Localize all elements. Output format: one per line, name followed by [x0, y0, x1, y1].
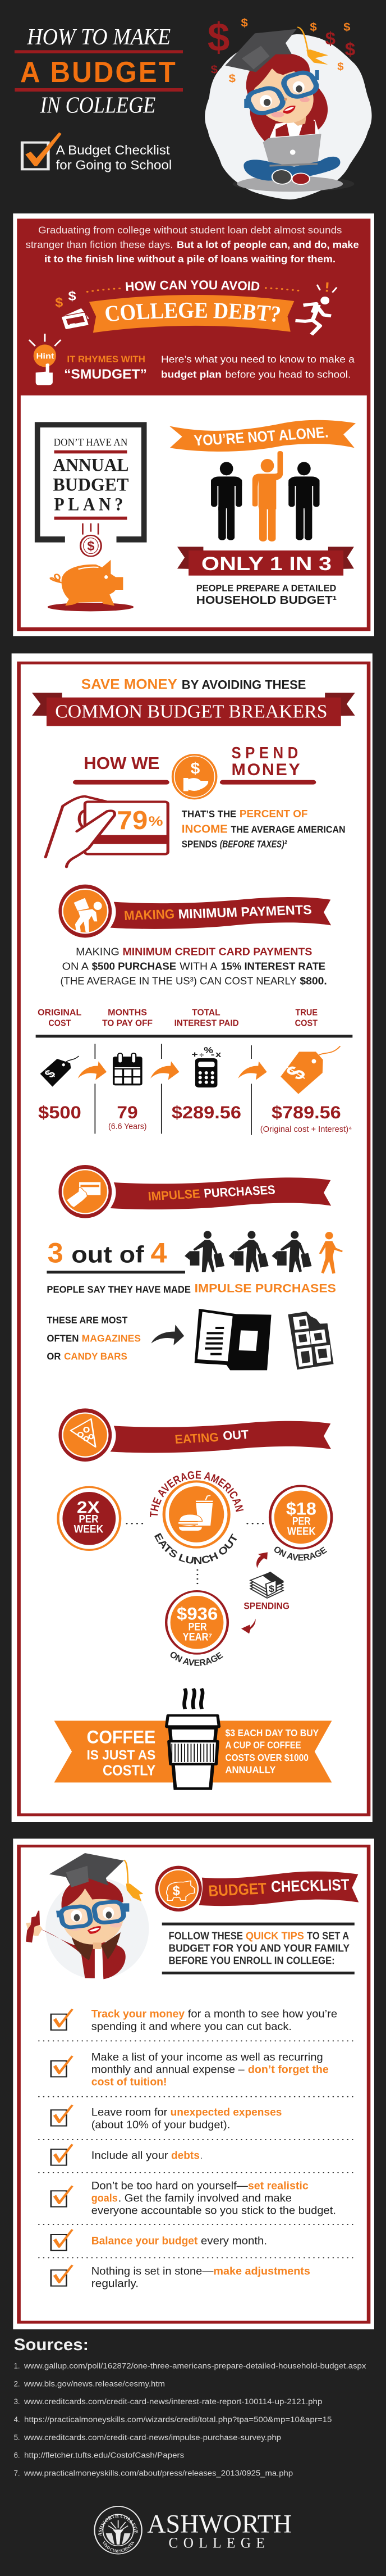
icon: hand holding credit card with 79%: 79 — [117, 805, 148, 835]
section header: making minimum payments — [58, 885, 331, 937]
text: follow these quick tips: TO SET A — [307, 1929, 349, 1942]
text: percent of income: PERCENT OF — [240, 808, 307, 820]
text: minimum payments paragraph: WITH A — [180, 961, 218, 972]
checklist item 4 — [51, 2144, 203, 2165]
text: percent of income: THAT’S THE — [182, 809, 236, 820]
circle: $18 per week: $18 — [286, 1499, 316, 1519]
icon: college seal — [94, 2506, 143, 2555]
sources list: 4. — [14, 2415, 20, 2424]
heading text: EATING — [174, 1431, 219, 1446]
illustration: stressed student with laptop — [205, 15, 372, 199]
sources list: www.practicalmoneyskills.com/about/press/releases_2013/0925_ma.php — [24, 2469, 293, 2478]
icon: pizza slice — [71, 1419, 95, 1447]
checklist item 1: for a month to see how you’re — [188, 2008, 337, 2020]
connector dots: vertical — [195, 1570, 199, 1586]
checklist item 5: . Get the family involved and make — [118, 2192, 292, 2204]
banner: coffee is just as costly — [54, 1688, 332, 1788]
illustration: stressed student with laptop: $ — [208, 15, 229, 60]
text: household budget: HOUSEHOLD BUDGET¹ — [196, 594, 337, 606]
icon: coin dropping into piggy bank — [48, 524, 134, 611]
column headings: TO PAY OFF — [102, 1018, 153, 1028]
icon: candy bar — [288, 1312, 334, 1369]
checklist item 2 — [51, 2051, 329, 2088]
illustration: stressed student with laptop: $ — [345, 39, 355, 60]
circle: 2x per week: 2X — [77, 1499, 100, 1517]
sources list: www.creditcards.com/credit-card-news/interest-rate-report-100114-up-2121.php — [24, 2397, 322, 2406]
heading text — [123, 902, 312, 923]
subtitle: A Budget Checklist — [56, 143, 170, 157]
arrow — [150, 1061, 179, 1080]
stat: 3 out of 4: out of — [71, 1242, 144, 1268]
heading text: MAKING — [123, 907, 175, 923]
subtitle: for Going to School — [56, 157, 172, 172]
heading text: BUDGET — [208, 1879, 267, 1900]
hint text: rhymes with smudget: IT RHYMES WITH — [67, 354, 145, 365]
sources list: www.bls.gov/news.release/cesmy.htm — [24, 2379, 165, 2388]
text: coffee right: $3 EACH DAY TO BUY — [225, 1728, 319, 1738]
sources list: www.creditcards.com/credit-card-news/impulse-purchase-survey.php — [24, 2433, 281, 2442]
circle: 2x per week: PER — [79, 1513, 99, 1525]
sources list: 6. — [14, 2451, 20, 2460]
icon: calculator: ÷ — [199, 1052, 204, 1059]
circle: $18 per week: PER — [292, 1515, 311, 1527]
hint badge — [29, 334, 61, 385]
hint badge: Hint — [36, 352, 54, 361]
icon: credit cards and dollars — [55, 289, 90, 330]
text: coffee left — [86, 1727, 155, 1779]
text: percent of income: (BEFORE TAXES)² — [220, 839, 287, 850]
icon: black price tag: $ — [42, 1067, 59, 1080]
card: annual budget plan: ANNUAL — [53, 455, 128, 475]
panel: common budget breakers — [11, 653, 373, 1822]
column headings: INTEREST PAID — [174, 1018, 239, 1028]
icon: orange checkbox — [22, 133, 62, 169]
wordmark — [147, 2509, 292, 2551]
icon: orange price tag: $ — [280, 1062, 312, 1084]
arrow — [238, 1061, 267, 1080]
text: magazines or candy bars: OFTEN — [47, 1333, 79, 1344]
illustration: graduate student with marker — [26, 1853, 149, 1979]
heading text — [208, 1876, 350, 1900]
checklist item 3 — [51, 2105, 282, 2131]
text: minimum payments paragraph — [61, 946, 327, 987]
section header: budget checklist — [155, 1866, 359, 1911]
circle: 2x per week: WEEK — [74, 1523, 104, 1535]
text: minimum payments paragraph: MINIMUM CREDIT CARD PAYMENTS — [123, 946, 312, 958]
column headings: ORIGINAL — [38, 1008, 81, 1017]
heading: how can you avoid college debt — [86, 280, 300, 333]
checklist item 1 — [51, 2008, 337, 2032]
label: spending: SPENDING — [243, 1601, 290, 1612]
circle: $18 per week: ON AVERAGE — [274, 1547, 327, 1560]
text: minimum payments paragraph: $500 PURCHASE — [92, 961, 176, 972]
title: a budget: A BUDGET — [20, 56, 177, 88]
icon: black price tag — [40, 1056, 79, 1087]
icon: orange price tag — [280, 1046, 340, 1094]
arrow: dark — [151, 1325, 184, 1345]
text: budget plan intro: before you head to school. — [225, 369, 351, 380]
heading text — [148, 1183, 276, 1203]
heading: save money — [81, 677, 306, 693]
logo: ashworth college — [94, 2506, 292, 2555]
illustration: stressed student with laptop: $ — [325, 28, 336, 48]
icon: running figure — [296, 283, 337, 335]
column headings — [38, 1008, 318, 1028]
checklist item 1: Track your money — [91, 2008, 185, 2020]
card: annual budget plan: DON’T HAVE AN — [54, 436, 127, 448]
checklist item 6: every month. — [201, 2235, 267, 2247]
stat: 3 out of 4 — [47, 1237, 185, 1273]
text: people say they have made impulse purchases: PEOPLE SAY THEY HAVE MADE — [47, 1284, 191, 1295]
heading text: PURCHASES — [203, 1183, 276, 1200]
values: (6.6 Years) — [108, 1121, 147, 1131]
icon: three people, one with hand raised — [211, 451, 320, 541]
curved text: the average american: THE AVERAGE AMERICAN — [149, 1471, 243, 1517]
text: minimum payments paragraph: 15% INTEREST RATE — [221, 961, 325, 972]
icon: coin dropping into piggy bank: $ — [87, 539, 95, 553]
sources list: 1. — [14, 2362, 20, 2370]
curved text: eats lunch out: EATS LUNCH OUT — [154, 1532, 237, 1564]
icon: hand holding credit card with 79%: % — [149, 814, 163, 829]
illustration: stressed student with laptop: $ — [211, 63, 218, 76]
circle: $18 per week — [268, 1485, 333, 1560]
checklist item 1: spending it and where you can cut back. — [91, 2020, 292, 2032]
sources list: 5. — [14, 2433, 20, 2442]
illustration: stressed student with laptop: $ — [343, 21, 351, 34]
icon: hand holding card — [66, 1182, 101, 1208]
text: budget plan intro — [161, 354, 355, 380]
checklist item 5: Don’t be too hard on yourself— — [91, 2179, 248, 2192]
circle: $936 per year: YEAR⁷ — [183, 1631, 212, 1643]
heading: how we spend money: MONEY — [231, 760, 301, 779]
checklist item 7 — [51, 2265, 310, 2290]
text: coffee right: COSTS OVER $1000 — [225, 1753, 309, 1763]
text: coffee left: COFFEE — [86, 1727, 155, 1747]
arrow: down to $936 — [241, 1619, 256, 1633]
stat: 3 out of 4: 4 — [151, 1237, 167, 1268]
heading: save money: BY AVOIDING THESE — [182, 679, 306, 692]
title: in college: IN COLLEGE — [40, 93, 155, 118]
illustration: stressed student with laptop: $ — [241, 17, 248, 30]
heading: how can you avoid college debt: HOW CAN YOU AVOID — [126, 280, 259, 291]
checklist item 4: . — [200, 2149, 203, 2161]
wordmark: ASHWORTH — [147, 2509, 292, 2538]
checklist item 7: make adjustments — [213, 2265, 310, 2277]
checklist item 3: unexpected expenses — [171, 2106, 282, 2118]
icon: credit cards and dollars: $ — [68, 289, 76, 303]
text: minimum payments paragraph: MAKING — [76, 946, 120, 958]
checklist item 3: (about 10% of your budget). — [91, 2119, 230, 2131]
text: magazines or candy bars — [47, 1315, 141, 1362]
sources list: 3. — [14, 2397, 20, 2406]
icon: hand and dollar coin — [172, 754, 217, 799]
heading text: IMPULSE — [148, 1187, 201, 1203]
intro paragraph — [26, 225, 359, 265]
subtitle — [56, 143, 172, 172]
column headings: COST — [48, 1018, 71, 1028]
sources heading: Sources: — [14, 2336, 89, 2354]
checklist item 5: set realistic — [248, 2179, 309, 2192]
panel: budget checklist — [13, 1838, 374, 2329]
text: people say they have made impulse purchases: IMPULSE PURCHASES — [195, 1282, 336, 1295]
heading: how we spend money — [73, 744, 316, 785]
icon: piggy outline: $ — [173, 1883, 180, 1898]
checklist item 2: don’t forget the — [248, 2064, 329, 2076]
values: $789.56 — [272, 1102, 341, 1122]
icon: calendar — [113, 1053, 143, 1085]
icon: magazine — [195, 1309, 272, 1370]
icon: credit cards and dollars: $ — [55, 295, 63, 310]
icon: piggy outline — [167, 1881, 195, 1900]
checklist item 5 — [51, 2179, 336, 2217]
icon: calculator: + — [191, 1049, 198, 1059]
section header: eating out — [58, 1408, 331, 1462]
icon: calculator — [191, 1045, 222, 1087]
text: household budget: PEOPLE PREPARE A DETAILED — [196, 583, 336, 594]
heading: how we spend money: HOW WE — [84, 753, 159, 773]
section header: impulse purchases — [58, 1165, 331, 1218]
text: people say they have made impulse purchases — [47, 1282, 336, 1295]
illustration: stressed student with laptop: $ — [310, 21, 317, 34]
checklist item 5: goals — [91, 2192, 118, 2204]
illustration: stressed student with laptop: $ — [337, 60, 344, 72]
hint text: rhymes with smudget — [64, 354, 147, 381]
heading text: OUT — [222, 1428, 250, 1442]
heading: save money: SAVE MONEY — [81, 677, 177, 693]
illustration: stressed student with laptop: $ — [229, 72, 236, 85]
icon: college seal: VIVO CUM SCIENTIA — [103, 2541, 135, 2552]
column headings: MONTHS — [108, 1008, 147, 1017]
heading text: MINIMUM PAYMENTS — [178, 902, 312, 921]
checklist item 2: cost of tuition! — [91, 2076, 167, 2088]
text: follow these quick tips — [162, 1923, 355, 1974]
checklist item 2: Make a list of your income as well as recurring — [91, 2051, 323, 2063]
icon: shoppers with bags — [185, 1231, 343, 1274]
card: annual budget plan: BUDGET — [53, 475, 128, 495]
header title block — [15, 24, 183, 172]
ribbon: only 1 in 3 — [177, 547, 354, 576]
text: magazines or candy bars: CANDY BARS — [64, 1351, 127, 1362]
text: coffee right: ANNUALLY — [225, 1765, 276, 1776]
wordmark: COLLEGE — [169, 2534, 270, 2551]
stat: 3 out of 4: 3 — [48, 1237, 63, 1268]
heading: how can you avoid college debt: COLLEGE DEBT? — [105, 302, 281, 322]
text: coffee right: A CUP OF COFFEE — [225, 1740, 301, 1751]
ribbon: common budget breakers — [32, 693, 355, 726]
text: household budget — [196, 583, 337, 606]
text: percent of income: SPENDS — [182, 839, 217, 850]
checklist item 4: debts — [171, 2149, 200, 2161]
icon: person carrying money bag — [74, 898, 102, 932]
checklist item 7: regularly. — [91, 2278, 139, 2290]
checklist item 7: Nothing is set in stone— — [91, 2265, 214, 2277]
connector dots — [127, 1522, 265, 1526]
icon: cup and burger — [178, 1495, 213, 1531]
checklist item 6 — [51, 2229, 267, 2250]
hint text: rhymes with smudget: “SMUDGET” — [64, 367, 147, 381]
text: coffee left: COSTLY — [103, 1763, 155, 1779]
banner: you're not alone — [169, 420, 356, 452]
column headings: COST — [295, 1018, 318, 1028]
sources list — [14, 2362, 366, 2478]
heading: how we spend money: SPEND — [231, 744, 302, 762]
values: (Original cost + Interest)⁴ — [260, 1124, 352, 1134]
circle: 2x per week — [58, 1487, 120, 1550]
panel: intro — [13, 213, 374, 636]
sources list: http://fletcher.tufts.edu/CostofCash/Papers — [24, 2451, 184, 2460]
text: coffee left: IS JUST AS — [86, 1747, 155, 1762]
circle: $18 per week: WEEK — [287, 1526, 316, 1537]
intro paragraph: stranger than fiction these days. — [26, 240, 173, 251]
text: magazines or candy bars: MAGAZINES — [82, 1333, 141, 1344]
icon: hand and dollar coin: $ — [191, 760, 200, 778]
arrow — [78, 1061, 107, 1080]
card: annual budget plan — [35, 422, 147, 543]
values: $500 — [38, 1102, 81, 1122]
icon: calculator: % — [204, 1045, 213, 1055]
circle: $936 per year — [165, 1590, 229, 1666]
title: how to make: HOW TO MAKE — [26, 24, 171, 49]
checklist item 3: Leave room for — [91, 2106, 168, 2118]
text: budget plan intro: budget plan — [161, 369, 222, 380]
icon: college seal: ASHWORTH COLLEGE — [98, 2514, 138, 2536]
circle: $936 per year: $936 — [177, 1603, 218, 1623]
text: magazines or candy bars: THESE ARE MOST — [47, 1315, 127, 1326]
text: minimum payments paragraph: ON A — [62, 961, 89, 972]
text: follow these quick tips: QUICK TIPS — [246, 1929, 304, 1942]
card: annual budget plan: PLAN? — [54, 494, 127, 515]
table: true cost of minimum payments — [36, 1008, 352, 1135]
icon: hand holding credit card with 79% — [45, 797, 168, 867]
banner: you're not alone: YOU’RE NOT ALONE. — [194, 427, 328, 446]
icon: stack of cash — [250, 1572, 283, 1598]
text: minimum payments paragraph: (THE AVERAGE IN THE US³) CAN COST NEARLY — [61, 975, 297, 987]
column headings: TOTAL — [192, 1008, 220, 1017]
text: minimum payments paragraph: $800. — [300, 975, 327, 987]
values — [38, 1102, 352, 1134]
arrow: up to $18 — [256, 1552, 268, 1568]
dotted row dividers — [39, 2041, 355, 2258]
icon: calculator: x — [215, 1049, 222, 1059]
checklist item 4: Include all your — [91, 2149, 168, 2161]
ribbon: only 1 in 3: ONLY 1 IN 3 — [201, 552, 332, 575]
checklist item 2: monthly and annual expense – — [91, 2064, 245, 2076]
text: follow these quick tips: FOLLOW THESE — [169, 1929, 243, 1942]
values: $289.56 — [172, 1102, 241, 1122]
sources list: 7. — [14, 2469, 20, 2478]
circle: $936 per year: PER — [189, 1621, 207, 1633]
circle: $936 per year: ON AVERAGE — [171, 1651, 223, 1666]
icon: coffee cup — [167, 1688, 219, 1788]
column headings: TRUE — [296, 1008, 318, 1017]
circle: the average american eats lunch out — [149, 1471, 243, 1564]
text: percent of income — [182, 808, 346, 850]
icon: stack of cash: $ — [269, 1583, 274, 1594]
values: 79 — [117, 1102, 138, 1122]
text: magazines or candy bars: OR — [47, 1351, 61, 1362]
text: percent of income: INCOME — [182, 822, 228, 835]
text: coffee right — [225, 1728, 319, 1776]
sources list: 2. — [14, 2379, 20, 2388]
icon: calculator: - — [211, 1049, 215, 1059]
checklist item 6: Balance your budget — [91, 2235, 198, 2247]
